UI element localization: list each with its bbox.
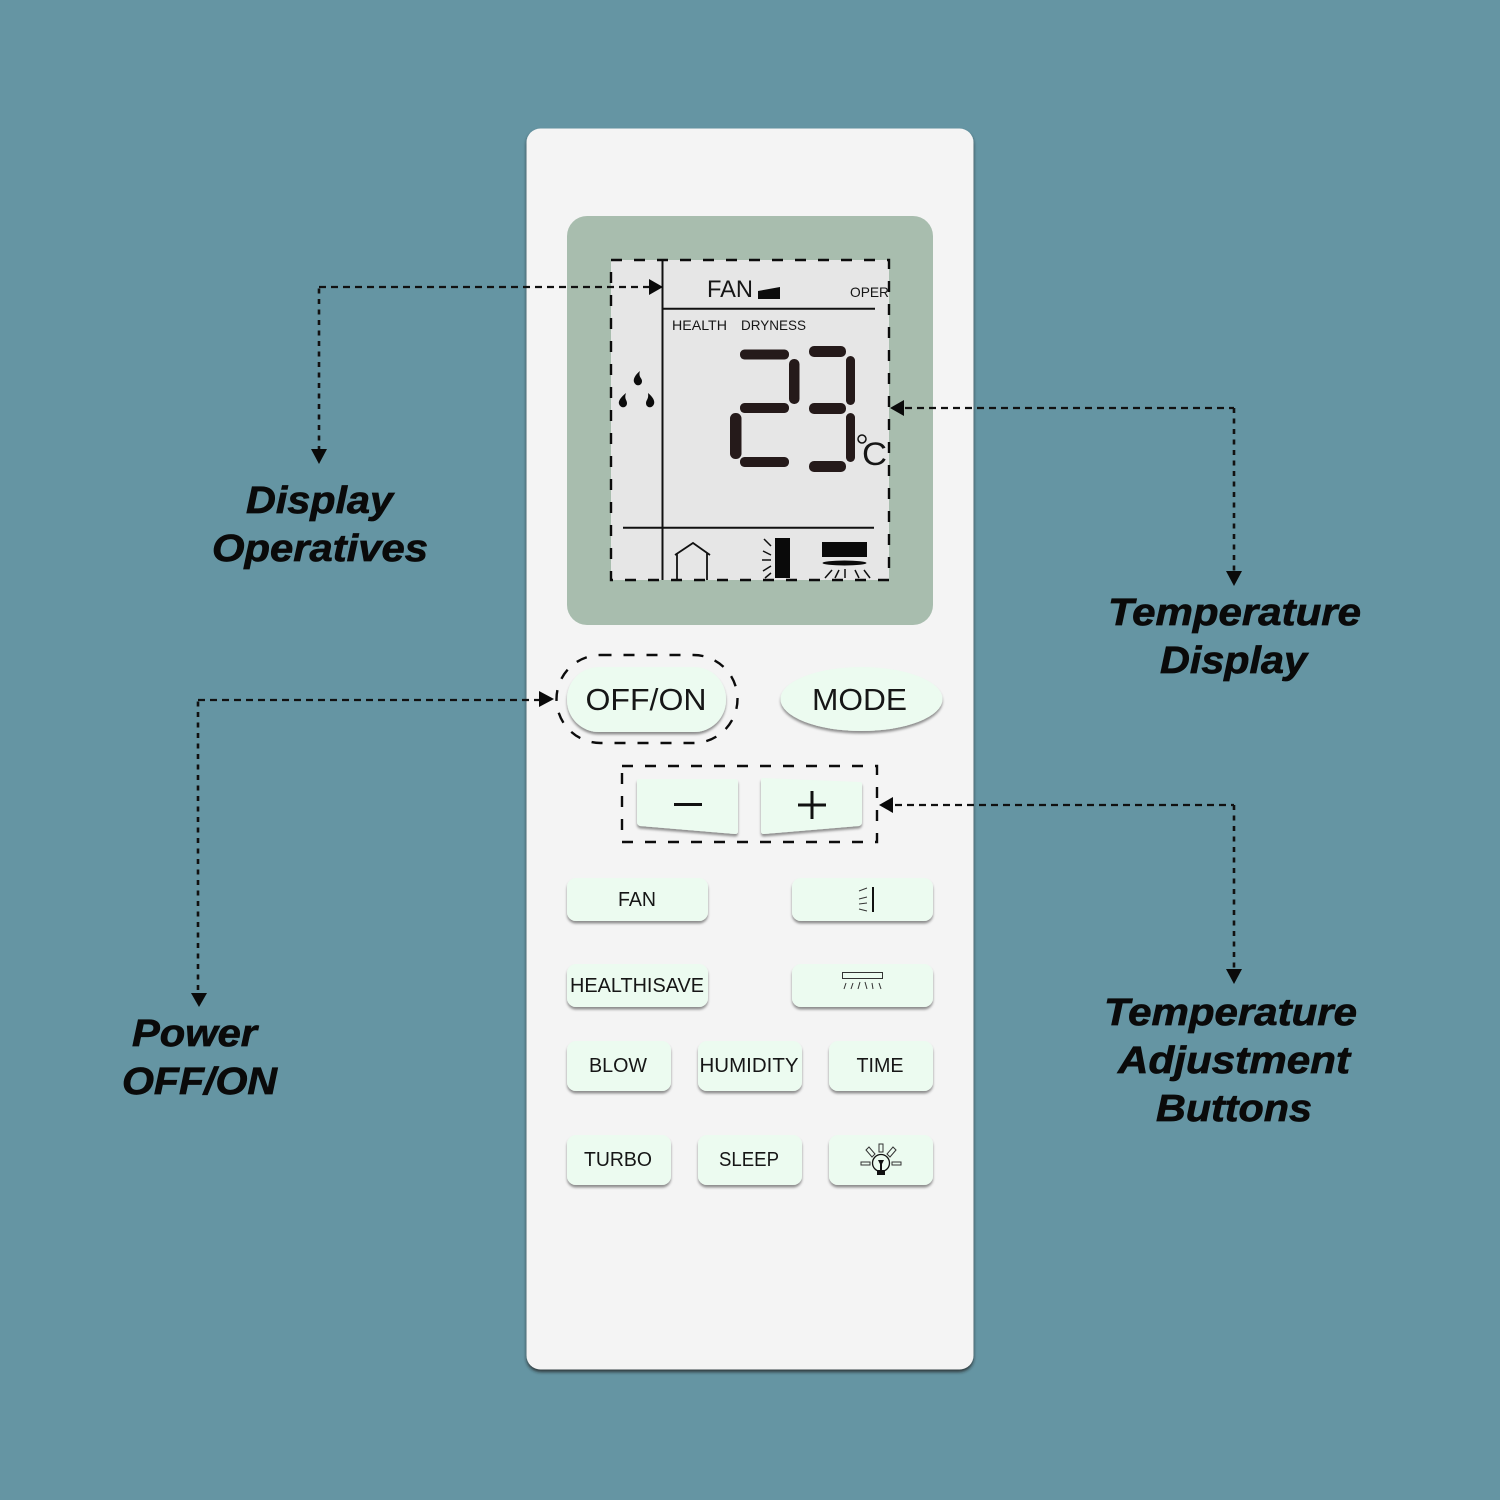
button: minus xyxy=(637,779,738,834)
button: swing xyxy=(792,878,933,921)
button: light xyxy=(829,1135,933,1185)
label: Power OFF/ON: Power xyxy=(132,1013,259,1055)
label: Display Operatives: Operatives xyxy=(212,528,428,570)
icon: vertical swing xyxy=(762,538,790,578)
FAN indicator xyxy=(707,276,780,303)
button: TIME: TIME xyxy=(856,1055,904,1077)
label: Temperature Adjustment Buttons: Buttons xyxy=(1156,1088,1312,1130)
label: Temperature Adjustment Buttons xyxy=(1104,992,1357,1130)
button: SLEEP: SLEEP xyxy=(719,1149,779,1171)
dashed highlight: OFF/ON xyxy=(556,655,738,743)
FAN indicator: FAN xyxy=(707,276,753,303)
icon: house xyxy=(675,543,710,580)
arrow: display operatives xyxy=(311,279,663,464)
label: Power OFF/ON: OFF/ON xyxy=(122,1061,279,1103)
dashed highlight: display xyxy=(611,260,889,580)
label: Display Operatives xyxy=(212,480,428,570)
DRYNESS label: DRYNESS xyxy=(741,317,806,333)
button: MODE: MODE xyxy=(812,682,907,717)
button: HEALTH I SAVE: HEALTHISAVE xyxy=(570,975,704,997)
button: TIME xyxy=(829,1041,933,1091)
HEALTH label: HEALTH xyxy=(672,317,727,333)
arrow: temperature adjustment xyxy=(879,797,1242,984)
button: OFF/ON xyxy=(567,667,726,732)
label: Temperature Display xyxy=(1108,592,1361,682)
icon: light bulb xyxy=(861,1144,901,1175)
button: MODE xyxy=(780,667,942,731)
button: TURBO: TURBO xyxy=(584,1149,652,1171)
button: FAN: FAN xyxy=(618,889,656,911)
arrow: temperature display xyxy=(890,400,1242,586)
LCD screen xyxy=(611,260,889,580)
label: Temperature Display: Temperature xyxy=(1108,592,1361,634)
button: plus xyxy=(761,778,862,834)
label: Temperature Adjustment Buttons: Temperature xyxy=(1104,992,1357,1034)
remote body xyxy=(526,128,974,1370)
button: BLOW xyxy=(567,1041,671,1091)
label: Temperature Adjustment Buttons: Adjustment xyxy=(1117,1040,1351,1082)
button: FAN xyxy=(567,878,708,921)
dashed highlight: temperature buttons xyxy=(622,766,877,842)
display bezel xyxy=(567,216,933,625)
icon: air conditioner xyxy=(822,542,870,578)
OPER label: OPER xyxy=(850,284,889,300)
button: SLEEP xyxy=(698,1135,802,1185)
button: HUMIDITY xyxy=(698,1041,802,1091)
temperature digits 23 xyxy=(730,346,855,472)
button: HEALTH I SAVE xyxy=(567,964,708,1007)
label: Display Operatives: Display xyxy=(246,480,395,522)
icon: water drops xyxy=(619,371,654,407)
button: BLOW: BLOW xyxy=(589,1055,647,1077)
button: TURBO xyxy=(567,1135,671,1185)
button: HUMIDITY: HUMIDITY xyxy=(700,1055,798,1077)
button: OFF/ON: OFF/ON xyxy=(586,682,706,717)
degree Celsius: C xyxy=(862,436,887,472)
label: Power OFF/ON xyxy=(122,1013,279,1103)
label: Temperature Display: Display xyxy=(1160,640,1309,682)
arrow: power off/on xyxy=(191,691,554,1007)
button: air flow xyxy=(792,964,933,1007)
